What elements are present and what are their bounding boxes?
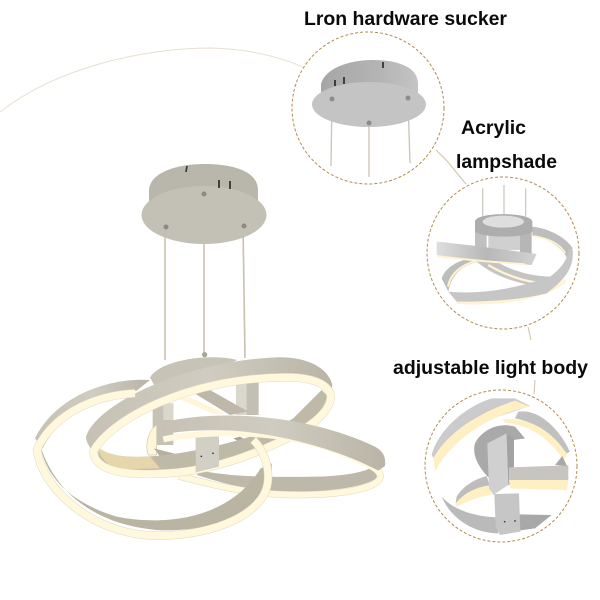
ring: middle band front bbox=[86, 357, 332, 474]
connector: sucker to lampshade detail bbox=[436, 150, 466, 184]
ring: right band top bbox=[163, 415, 385, 477]
label: lampshade: lampshade bbox=[456, 152, 557, 173]
hanging rods bbox=[165, 195, 245, 360]
lampshade rings bbox=[437, 185, 573, 303]
light rings bbox=[35, 352, 385, 536]
pendant lamp main image bbox=[35, 164, 385, 536]
connector: lampshade to light body detail bbox=[528, 327, 531, 340]
central hub and columns bbox=[147, 352, 260, 457]
connector: light body top stub bbox=[534, 380, 535, 394]
dashed circle bbox=[427, 177, 579, 329]
light body close-up bbox=[432, 398, 570, 535]
label: Lron hardware sucker: Lron hardware sucker bbox=[304, 9, 508, 30]
dashed circle bbox=[292, 32, 444, 184]
sucker rods bbox=[331, 100, 410, 177]
label: Acrylic: Acrylic bbox=[461, 118, 526, 139]
mounting plate block bbox=[196, 436, 219, 472]
ring: right band lower bbox=[178, 460, 380, 495]
dashed circle bbox=[425, 390, 577, 542]
detail circle: acrylic lampshade bbox=[427, 177, 579, 329]
sucker canopy bbox=[312, 60, 426, 127]
ceiling canopy bbox=[142, 164, 266, 244]
label: adjustable light body: adjustable light body bbox=[393, 358, 588, 379]
connector: curved line to sucker detail bbox=[0, 48, 303, 112]
ring: big left band upper bbox=[35, 380, 150, 448]
ring: rear band of middle ring bbox=[98, 390, 330, 474]
ring: big left band lower bbox=[37, 393, 272, 536]
detail circle: iron hardware sucker bbox=[292, 32, 444, 184]
detail circle: adjustable light body bbox=[425, 390, 577, 542]
